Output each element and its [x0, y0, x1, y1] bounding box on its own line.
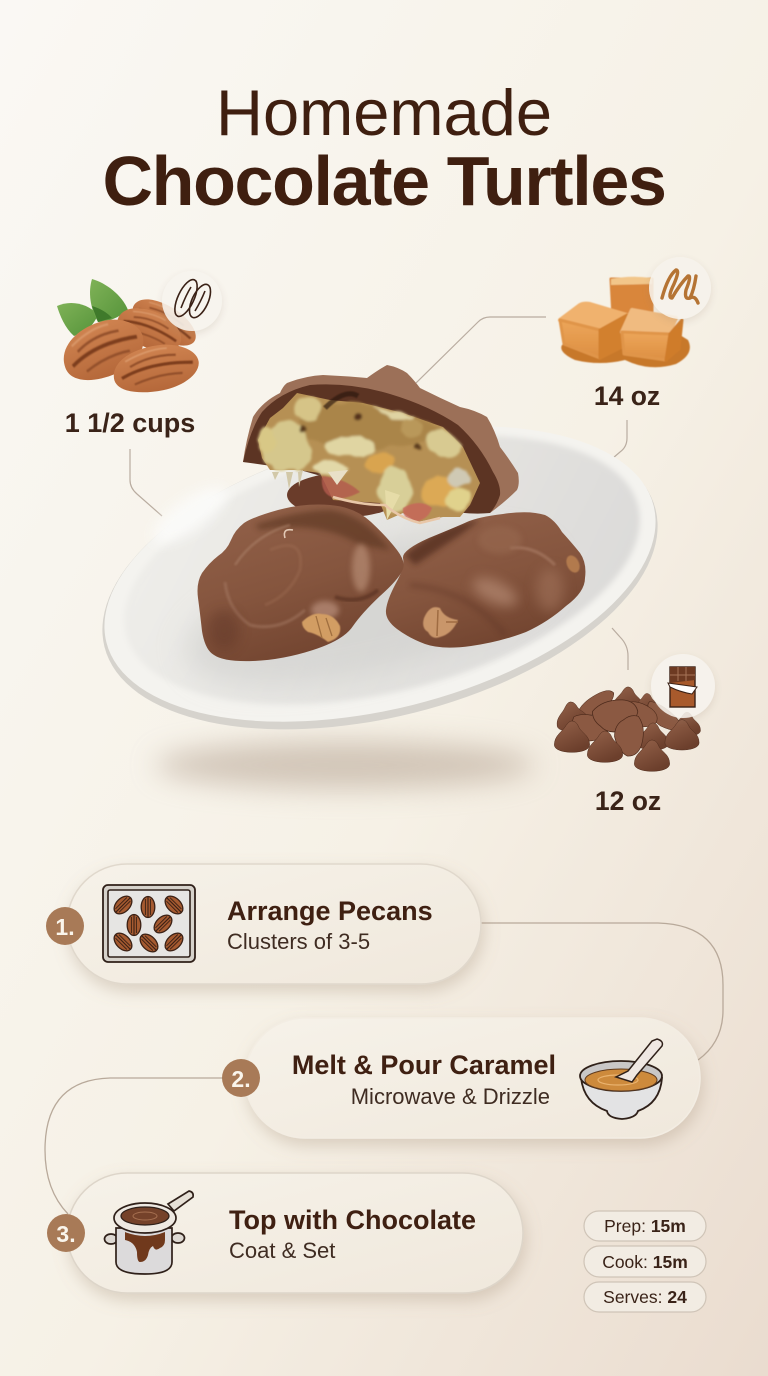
connector lines from ingredients to plate [130, 317, 628, 670]
nuts [126, 289, 203, 355]
step 2 text: Microwave & Drizzle [351, 1084, 550, 1109]
step 2 text: Melt & Pour Caramel [292, 1050, 556, 1080]
plate [71, 374, 689, 782]
title [102, 76, 666, 220]
icon: bowl of caramel with spoon [580, 1039, 662, 1119]
turtle: cut open on top [243, 365, 519, 523]
ingredient: pecans [55, 279, 203, 398]
turtle: right [386, 512, 585, 648]
title: Chocolate Turtles [102, 142, 666, 220]
step 2 text [292, 1050, 556, 1109]
icon: baking tray with pecans [103, 885, 195, 962]
label: caramel quantity: 14 oz [594, 381, 660, 411]
icon badge: chocolate bar [651, 654, 715, 718]
turtle: back piece behind cut turtle [287, 473, 403, 517]
step 3 text [229, 1205, 476, 1263]
step 3 card [67, 1173, 523, 1293]
caramel and nut filling [258, 391, 470, 512]
step 3 number [47, 1214, 85, 1252]
plate shadow [155, 741, 535, 789]
label: chocolate quantity: 12 oz [595, 786, 661, 816]
step connectors [45, 923, 723, 1214]
icon badge: caramel drizzle [649, 257, 711, 319]
step 2 card [245, 1018, 700, 1138]
turtle: left [198, 505, 404, 661]
step 2 number [222, 1059, 260, 1097]
step 1 number: 1. [55, 914, 75, 940]
stat pill: prep: Prep: 15m [604, 1216, 686, 1236]
title: Homemade [216, 76, 552, 149]
label: pecan quantity: 1 1/2 cups [65, 408, 195, 438]
icon badge: pecan outline [162, 271, 222, 331]
step 1 number [46, 907, 84, 945]
stat pill: serves: Serves: 24 [603, 1287, 687, 1307]
step 1 text [227, 896, 433, 954]
step 3 text: Coat & Set [229, 1238, 335, 1263]
step 2 number: 2. [231, 1066, 251, 1092]
stat pill: serves [584, 1282, 706, 1312]
step 1 text: Clusters of 3-5 [227, 929, 370, 954]
step 3 text: Top with Chocolate [229, 1205, 476, 1235]
ingredient: caramels [560, 277, 690, 367]
ingredient: chocolate chips [554, 687, 700, 771]
stat pill: prep [584, 1211, 706, 1241]
step 3 [47, 1173, 523, 1293]
step 1 [46, 864, 481, 984]
step 1 text: Arrange Pecans [227, 896, 433, 926]
step 1 card [67, 864, 481, 984]
stat pill: cook: Cook: 15m [602, 1252, 688, 1272]
leaves [57, 279, 128, 336]
step 2 [222, 1018, 700, 1138]
step 3 number: 3. [56, 1221, 76, 1247]
stat pill: cook [584, 1246, 706, 1277]
icon: double boiler with chocolate [104, 1191, 193, 1274]
